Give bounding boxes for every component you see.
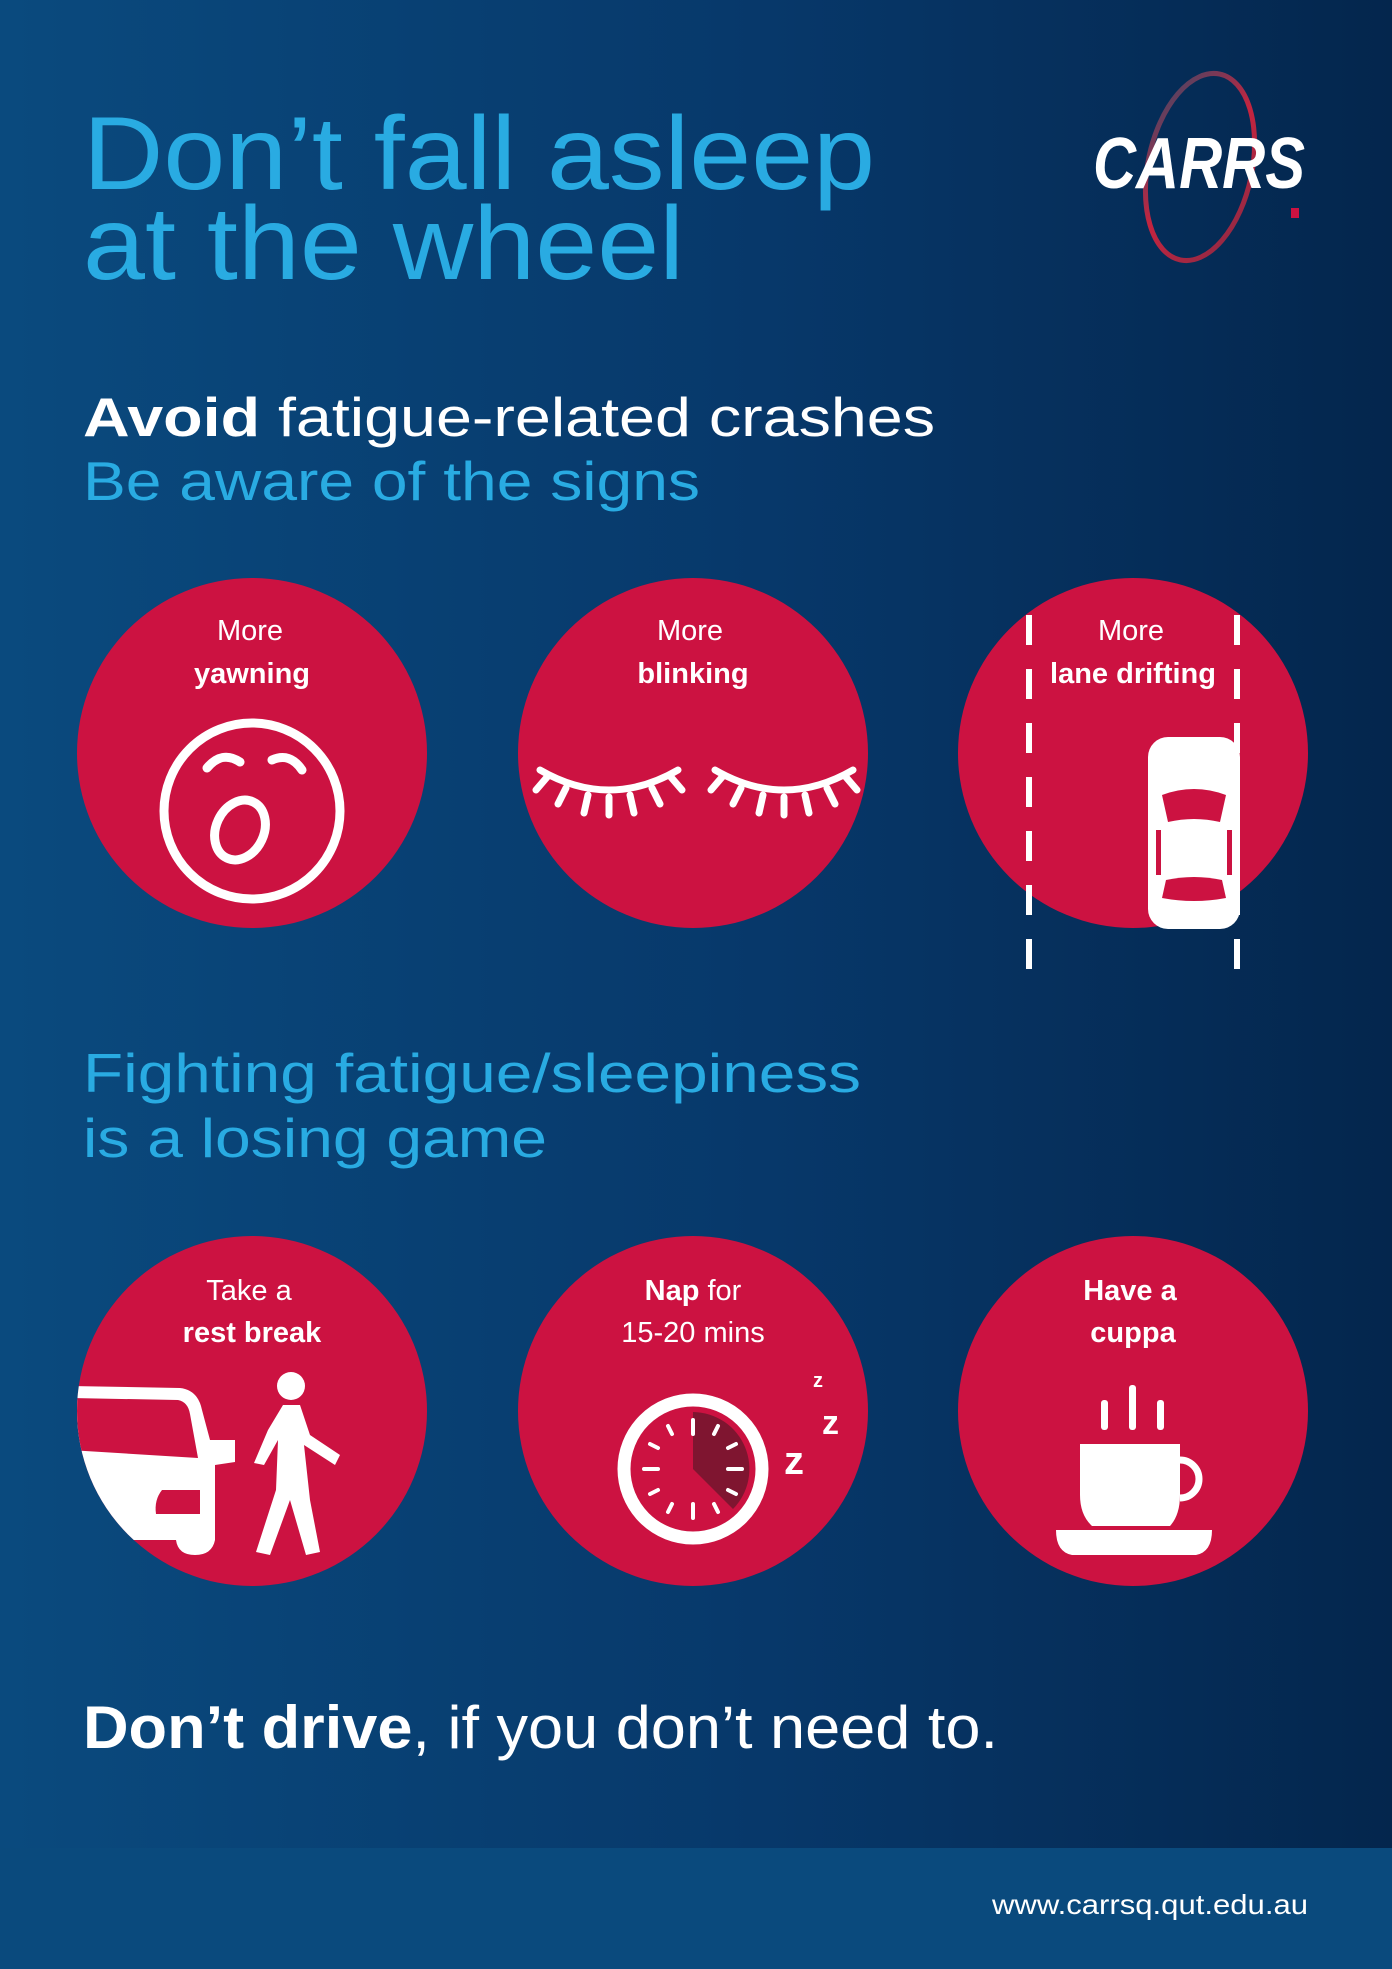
panel: lane drifting: More [1098,615,1164,647]
title: Don’t fall asleep [83,96,875,212]
heading: fighting fatigue: Fighting fatigue/sleepiness [83,1042,861,1104]
panel: blinking: More [657,615,723,647]
panel: yawning [77,578,427,928]
icon: zzz: z [822,1404,839,1442]
panel: nap: 15-20 mins [621,1317,765,1349]
heading: fighting fatigue: is a losing game [83,1107,547,1169]
icon: yawning face [164,723,340,899]
panel: lane drifting: lane drifting [1050,658,1216,690]
closing statement: Don’t drive , if you don’t need to. [83,1694,998,1761]
panel: cuppa: cuppa [1090,1317,1177,1349]
icon: zzz: z [813,1370,823,1392]
icon: car and walker [70,1372,340,1555]
icon: closed eyes [536,770,857,815]
panel: lane drifting [958,578,1308,979]
subtitle: Be aware of the signs [83,450,700,512]
panel: nap: Nap for [645,1275,742,1307]
icon: car top view [1148,737,1240,929]
icon: coffee cup [1056,1385,1212,1555]
title: at the wheel [83,186,684,302]
logo: CARRS: CARRS [1093,124,1305,204]
heading: fighting fatigue [83,1042,861,1169]
panel: blinking: blinking [637,658,749,690]
subtitle [83,386,935,512]
icon: zzz [784,1370,839,1483]
subtitle: Avoid fatigue-related crashes [83,386,935,448]
panel: blinking [518,578,868,928]
title [83,96,875,302]
panel: cuppa [958,1236,1308,1586]
panel: yawning: yawning [194,658,310,690]
icon: zzz: z [784,1439,804,1483]
panel: rest break [70,1236,427,1586]
panel: cuppa: Have a [1083,1275,1178,1307]
panel: rest break: rest break [183,1317,322,1349]
footer band [0,1848,1392,1969]
icon: clock [624,1400,762,1538]
panel: nap [518,1236,868,1586]
url: www.carrsq.qut.edu.au [991,1889,1308,1920]
logo: CARRS [1093,63,1305,271]
panel: rest break: Take a [206,1275,293,1307]
panel: yawning: More [217,615,283,647]
